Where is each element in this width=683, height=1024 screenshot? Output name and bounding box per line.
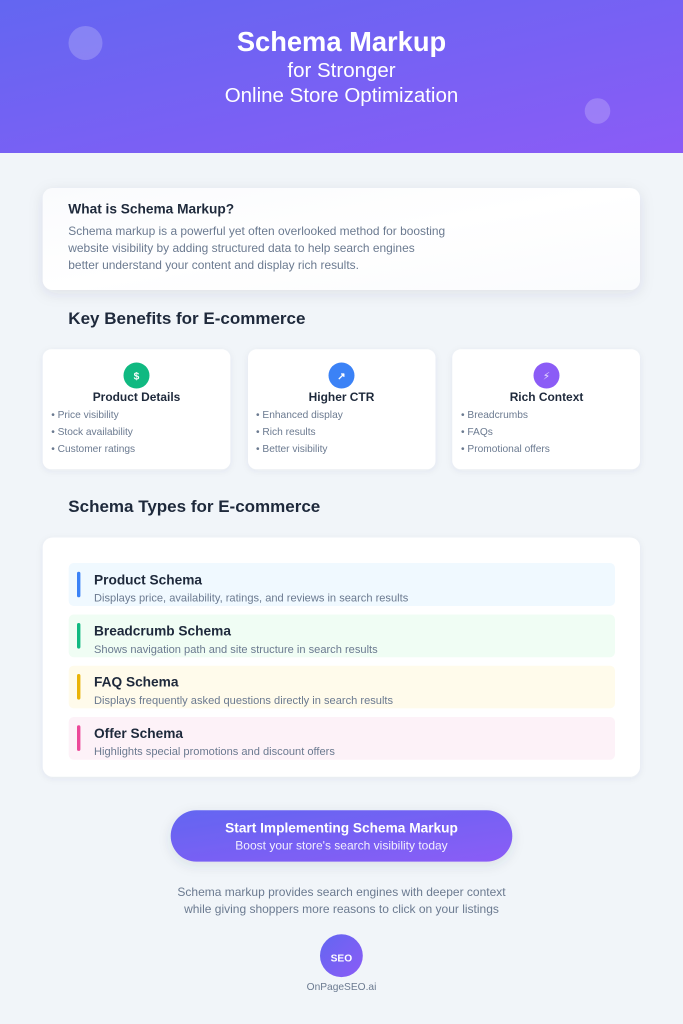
cta title: Start Implementing Schema Markup: [225, 820, 458, 835]
row: product schema: Displays price, availability, ratings, and reviews in search results: [94, 593, 409, 605]
icon: arrow: ↗: [337, 372, 346, 382]
row: faq schema: Displays frequently asked questions directly in search results: [94, 695, 394, 707]
panel: higher ctr: [248, 349, 436, 469]
row: offer schema: Highlights special promotions and discount offers: [94, 746, 335, 758]
bullet list: • Better visibility: [256, 444, 328, 455]
row: product schema: [69, 563, 615, 606]
icon: arrow: [328, 362, 354, 388]
heading: key benefits: Key Benefits for E-commerce: [68, 309, 305, 328]
logo: SEO badge: SEO: [331, 954, 352, 965]
icon: lightning: [534, 362, 560, 388]
row: breadcrumb schema: [69, 614, 615, 657]
panel body text: better understand your content and display rich results.: [68, 258, 359, 272]
row: offer schema: [69, 717, 615, 760]
subtitle line 1: for Stronger: [287, 59, 396, 82]
panel body text: Schema markup is a powerful yet often overlooked method for boosting: [68, 224, 445, 238]
subtitle line 2: Online Store Optimization: [225, 84, 458, 107]
card title: Rich Context: [510, 390, 583, 404]
decorative circle left: [68, 26, 102, 60]
row: faq schema: [69, 666, 615, 708]
icon: lightning: ⚡: [543, 372, 550, 382]
row: faq schema: FAQ Schema: [94, 675, 179, 690]
row: product schema: Product Schema: [94, 572, 202, 587]
panel: what is schema markup: [43, 188, 640, 290]
title: Schema Markup: [237, 26, 446, 57]
cta subtitle: Boost your store's search visibility today: [235, 838, 448, 852]
panel: product details: [43, 349, 230, 469]
heading: schema types: Schema Types for E-commerce: [68, 497, 320, 516]
icon: dollar: [124, 362, 150, 388]
panel: schema types: [43, 538, 640, 777]
panel: rich context: [452, 349, 640, 469]
icon: dollar: $: [134, 372, 140, 382]
row: offer schema: Offer Schema: [94, 726, 183, 741]
call to action button: [171, 810, 512, 862]
card title: Higher CTR: [309, 390, 375, 404]
bullet list: • Enhanced display: [256, 410, 344, 421]
card title: Product Details: [93, 390, 181, 404]
bullet list: • Breadcrumbs: [461, 410, 528, 421]
closing text: Schema markup provides search engines with deeper context: [177, 885, 506, 899]
row: breadcrumb schema: Shows navigation path and site structure in search results: [94, 644, 378, 656]
panel heading: What is Schema Markup?: [68, 201, 234, 216]
bullet list: • Promotional offers: [461, 444, 550, 455]
bullet list: • Rich results: [256, 427, 316, 438]
bullet list: • FAQs: [461, 427, 493, 438]
row: breadcrumb schema: Breadcrumb Schema: [94, 624, 231, 638]
bullet list: • Stock availability: [51, 427, 134, 438]
bullet list: • Price visibility: [51, 410, 120, 421]
bullet list: • Customer ratings: [51, 444, 135, 455]
logo: SEO badge: [320, 934, 363, 977]
decorative circle right: [585, 98, 610, 124]
panel body text: website visibility by adding structured data to help search engines: [67, 241, 415, 255]
closing text: while giving shoppers more reasons to click on your listings: [183, 902, 499, 916]
header banner: [0, 0, 683, 153]
brand name: OnPageSEO.ai: [307, 982, 376, 993]
